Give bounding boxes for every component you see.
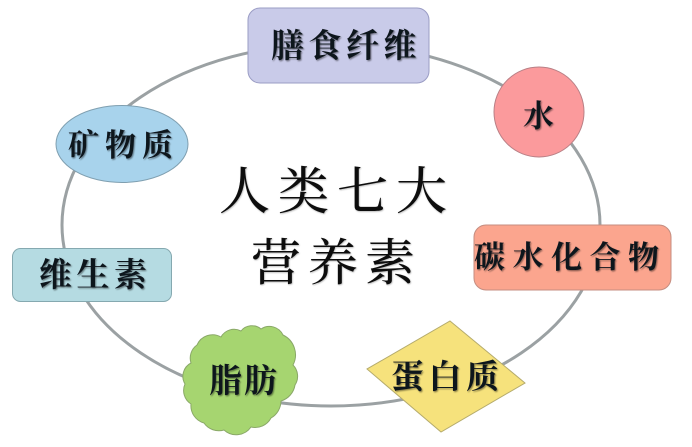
node: protein (diamond): 蛋白质 <box>391 359 504 396</box>
node: vitamins: 维生素 <box>39 257 152 294</box>
node: fat (cloud): 脂肪 <box>209 363 279 400</box>
center title <box>219 165 455 291</box>
node: water: 水 <box>523 99 554 134</box>
center title: 人类七大 <box>219 165 455 221</box>
center title: 营养素 <box>251 235 422 291</box>
node: carbohydrates: 碳水化合物 <box>474 240 666 275</box>
node: vitamins <box>12 248 172 302</box>
node: minerals <box>56 106 188 182</box>
node: dietary fiber: 膳食纤维 <box>271 28 421 65</box>
node: carbohydrates <box>474 225 671 290</box>
node: dietary fiber <box>248 8 429 83</box>
ring connecting the nutrients <box>62 44 600 406</box>
node: protein (diamond) <box>367 321 525 432</box>
node: minerals: 矿物质 <box>68 128 179 163</box>
node: water <box>494 67 584 157</box>
node: fat (cloud) <box>183 326 298 435</box>
